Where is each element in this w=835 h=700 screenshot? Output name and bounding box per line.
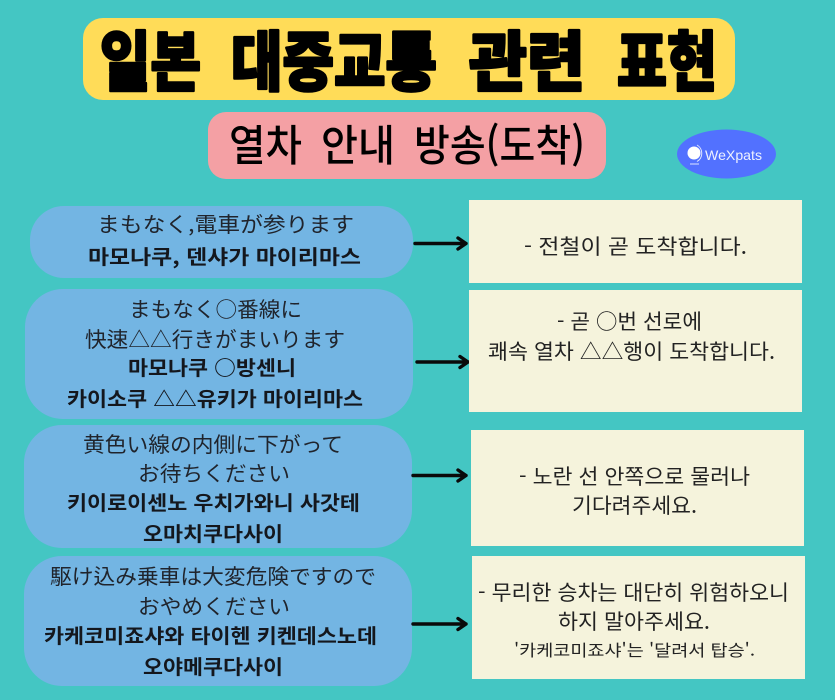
- panel: translation 2: 쾌속 열차 △△행이 도착합니다.: [488, 336, 775, 366]
- panel: phrase 3 Japanese and pronunciation: 키이로이센노 우치가와니 사갓테: [67, 487, 360, 516]
- arrow 3: [413, 470, 466, 481]
- title: [83, 10, 735, 104]
- panel: phrase 4 Japanese and pronunciation: 오야메쿠다사이: [143, 651, 283, 680]
- subtitle: [208, 112, 606, 179]
- panel: phrase 4 Japanese and pronunciation: [24, 556, 412, 686]
- logo: WeXpats: [677, 130, 776, 178]
- panel: translation 4: 하지 말아주세요.: [558, 606, 710, 636]
- title: 관련: [469, 10, 585, 104]
- panel: phrase 2 Japanese and pronunciation: 快速△△行きがまいります: [85, 324, 345, 354]
- panel: phrase 3 Japanese and pronunciation: 黄色い線の内側に下がって: [83, 429, 343, 459]
- panel: phrase 1 Japanese and pronunciation: [30, 206, 413, 278]
- panel: translation 2: - 곧 ○번 선로에: [557, 306, 702, 336]
- panel: phrase 2 Japanese and pronunciation: 카이소쿠 △△유키가 마이리마스: [67, 383, 363, 412]
- subtitle: 열차: [229, 112, 302, 174]
- panel: translation 3: - 노란 선 안쪽으로 물러나: [519, 461, 750, 491]
- panel: translation 3: 기다려주세요.: [572, 490, 697, 520]
- panel: phrase 2 Japanese and pronunciation: [25, 289, 413, 419]
- panel: translation 4: [472, 556, 805, 679]
- logo: WeXpats: WeXpats: [705, 147, 762, 163]
- subtitle: 안내: [321, 112, 395, 174]
- panel: translation 4: - 무리한 승차는 대단히 위험하오니: [478, 577, 789, 607]
- panel: phrase 2 Japanese and pronunciation: 마모나쿠 ○방센니: [128, 352, 296, 381]
- panel: translation 4: '카케코미죠샤'는 '달려서 탑승'.: [514, 637, 755, 661]
- panel: translation 1: - 전철이 곧 도착합니다.: [524, 231, 747, 261]
- title: 일본: [100, 10, 201, 104]
- subtitle: 방송(도착): [414, 112, 585, 174]
- panel: translation 1: [469, 200, 802, 283]
- arrow 1: [415, 238, 466, 249]
- icon: globe speech bubble: [688, 145, 702, 164]
- arrow 2: [417, 356, 468, 368]
- arrow 4: [413, 618, 466, 630]
- panel: phrase 4 Japanese and pronunciation: 카케코미죠샤와 타이헨 키켄데스노데: [44, 620, 377, 649]
- panel: phrase 2 Japanese and pronunciation: まもなく○番線に: [129, 294, 302, 324]
- panel: phrase 3 Japanese and pronunciation: お待ちください: [138, 458, 290, 488]
- panel: phrase 3 Japanese and pronunciation: 오마치쿠다사이: [143, 518, 283, 547]
- panel: phrase 1 Japanese and pronunciation: 마모나쿠, 덴샤가 마이리마스: [88, 241, 361, 270]
- panel: phrase 1 Japanese and pronunciation: まもなく,電車が参ります: [97, 209, 354, 239]
- panel: phrase 3 Japanese and pronunciation: [24, 425, 412, 548]
- title: 대중교통: [231, 10, 437, 104]
- panel: translation 2: [469, 290, 802, 412]
- title: 표현: [617, 10, 717, 104]
- panel: translation 3: [471, 430, 804, 546]
- panel: phrase 4 Japanese and pronunciation: おやめください: [138, 591, 290, 621]
- panel: phrase 4 Japanese and pronunciation: 駆け込み乗車は大変危険ですので: [50, 561, 376, 591]
